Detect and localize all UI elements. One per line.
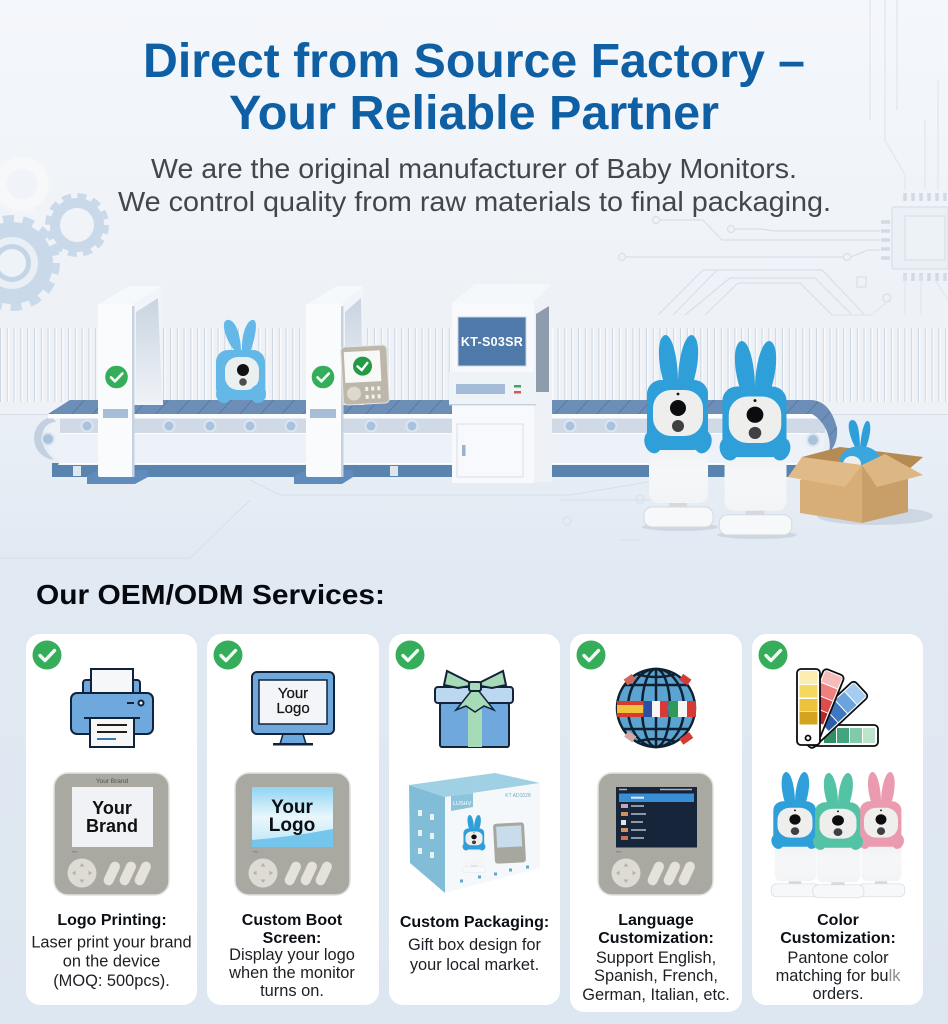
panel: logo printing xyxy=(26,634,197,1005)
label: Customization: xyxy=(780,930,896,947)
panel: custom boot screen xyxy=(207,634,379,1005)
label: German, Italian, etc. xyxy=(582,986,730,1004)
label: when the monitor xyxy=(228,964,355,982)
label: Color xyxy=(817,912,859,929)
device: your brand: Your Brand xyxy=(96,778,129,785)
label xyxy=(400,914,549,974)
panel: language customization xyxy=(570,634,742,1012)
label: Customization: xyxy=(598,930,714,947)
label: matching for bulk xyxy=(776,967,901,985)
rollers xyxy=(42,420,819,446)
label: (MOQ: 500pcs). xyxy=(53,972,170,990)
label: Screen: xyxy=(263,930,321,947)
large baby cameras xyxy=(642,335,797,539)
icon: check xyxy=(576,640,606,670)
panel: color customization xyxy=(752,634,923,1005)
label: your local market. xyxy=(410,956,539,974)
screen label: KT-S03SR xyxy=(461,335,523,349)
icon: printer xyxy=(71,669,153,747)
conveyor belt xyxy=(34,400,837,477)
circuit board pattern xyxy=(0,0,948,558)
subtitle: We control quality from raw materials to final packaging. xyxy=(118,186,831,217)
label xyxy=(31,912,192,990)
label: Pantone color xyxy=(787,949,889,967)
label: Logo Printing: xyxy=(57,912,167,929)
icon: check xyxy=(396,640,424,670)
inspection gate 2 xyxy=(294,286,364,484)
label: Gift box design for xyxy=(408,936,542,954)
label: Spanish, French, xyxy=(594,967,718,985)
label: Display your logo xyxy=(229,946,355,964)
subtitle: We are the original manufacturer of Baby Monitors. xyxy=(151,153,797,184)
device: your brand: Brand xyxy=(86,816,138,836)
label xyxy=(228,912,355,1000)
icon: decorative gears xyxy=(0,156,106,307)
label xyxy=(776,912,901,1003)
device: your brand: Your xyxy=(92,798,132,818)
product box: KT AD1028 xyxy=(505,793,531,799)
device: boot screen: Logo xyxy=(269,815,315,836)
icon: check xyxy=(758,640,788,670)
product box: LUSHV xyxy=(453,801,471,807)
device: boot screen: Your xyxy=(271,797,314,818)
device: your brand xyxy=(54,773,169,895)
title xyxy=(143,35,805,140)
label: turns on. xyxy=(260,982,324,1000)
icon: gift box xyxy=(435,671,513,747)
label: on the device xyxy=(63,952,160,970)
panel: custom packaging xyxy=(389,634,560,1005)
icon: globe with flags xyxy=(617,669,696,747)
label: Custom Boot xyxy=(242,912,343,929)
title: Your Reliable Partner xyxy=(229,87,719,140)
label: Support English, xyxy=(596,949,716,967)
label: Language xyxy=(618,912,694,929)
three coloured baby cameras xyxy=(770,772,906,898)
label xyxy=(582,912,730,1004)
icon: computer monitor: Logo xyxy=(276,700,310,717)
label: Custom Packaging: xyxy=(400,914,549,931)
icon: check xyxy=(32,640,62,670)
monitor on belt xyxy=(341,345,389,405)
cardboard box with camera xyxy=(788,420,933,525)
icon: check xyxy=(214,640,242,670)
icon: pantone fan xyxy=(796,668,878,749)
device: language menu xyxy=(598,773,713,895)
product box xyxy=(409,773,540,893)
device: boot screen xyxy=(235,773,350,895)
central control machine xyxy=(449,284,552,483)
factory wall with slats xyxy=(0,316,948,415)
section heading: services: Our OEM/ODM Services: xyxy=(36,579,385,610)
mini camera in box xyxy=(840,420,880,474)
label: Laser print your brand xyxy=(31,934,192,952)
title: Direct from Source Factory – xyxy=(143,35,805,88)
inspection gate 1 xyxy=(87,286,163,484)
subtitle xyxy=(118,153,831,217)
icon: computer monitor: Your xyxy=(278,685,308,702)
label: orders. xyxy=(812,985,864,1003)
baby camera on belt xyxy=(216,320,266,403)
icon: computer monitor xyxy=(252,672,334,746)
